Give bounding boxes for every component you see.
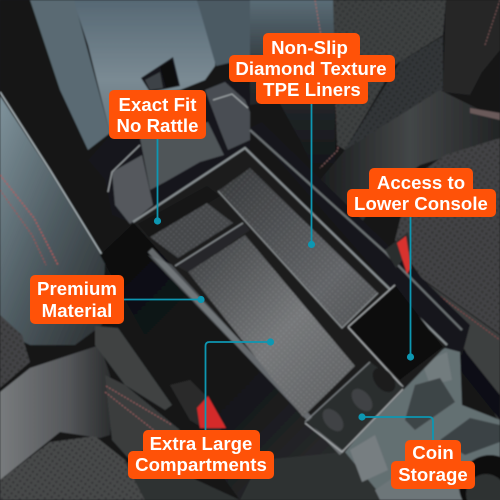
divider bars: [175, 222, 250, 272]
leader line: Exact Fit: [154, 139, 161, 225]
callout: Exact Fit No Rattle: [109, 90, 206, 139]
callout: Extra Large Compartments: [128, 430, 274, 479]
long upper compartment liner: [218, 168, 378, 328]
callout: Access to Lower Console: Lower Console: [354, 193, 488, 214]
back strip: [138, 186, 220, 238]
armrest hinge blocks: [88, 80, 250, 225]
left seat back: upper bolster: [0, 92, 105, 388]
center seatback panel: [30, 0, 250, 150]
callout: Coin Storage: Storage: [398, 464, 468, 485]
callout: Non-Slip Diamond Texture TPE Liners: [229, 33, 395, 104]
console lower body left side: [100, 222, 400, 500]
leader line: Access to Lower Console: [407, 217, 414, 361]
leader line: Non-Slip: [308, 103, 315, 248]
console rim highlight: [250, 130, 462, 330]
callout: Access to Lower Console: [347, 168, 496, 217]
callout: Extra Large Compartments: Extra Large: [150, 433, 252, 454]
small compartment liner: [150, 203, 233, 258]
callout: Premium Material: [30, 275, 124, 324]
callout: Non-Slip Diamond Texture TPE Liners: Diamond Texture: [235, 58, 387, 79]
callout: Exact Fit No Rattle: Exact Fit: [119, 94, 196, 115]
callout: Coin Storage: [391, 440, 475, 489]
callout: Non-Slip Diamond Texture TPE Liners: Non-Slip: [271, 37, 348, 58]
callout: Extra Large Compartments: Compartments: [135, 454, 267, 475]
tray organizer: [133, 148, 447, 453]
leader line: Premium Material: [124, 296, 205, 303]
callout: Exact Fit No Rattle: No Rattle: [116, 115, 199, 136]
right seat: leather bolster: [250, 0, 338, 172]
red seat belt buckles: [170, 232, 412, 435]
console left wall strip: [148, 255, 252, 342]
large compartment liner: [188, 235, 355, 417]
callout: Premium Material: Premium: [37, 278, 117, 299]
right seat: textured back: [333, 0, 500, 150]
leader line: Extra Large Compartments: [206, 338, 274, 430]
callout: Non-Slip Diamond Texture TPE Liners: TPE Liners: [263, 79, 361, 100]
console front: cupholder area: [345, 348, 500, 500]
right seat: cushion bolster and textured cushion: [320, 90, 500, 425]
black lower console access opening: [348, 285, 443, 387]
callout: Coin Storage: Coin: [412, 442, 454, 463]
leader line: Coin Storage: [358, 413, 433, 440]
coin storage compartment: [305, 362, 403, 452]
callout: Premium Material: Material: [42, 300, 112, 321]
console right wall: [250, 122, 470, 355]
left seat: lower bolster and cushion: [0, 326, 240, 500]
callout: Access to Lower Console: Access to: [377, 172, 465, 193]
